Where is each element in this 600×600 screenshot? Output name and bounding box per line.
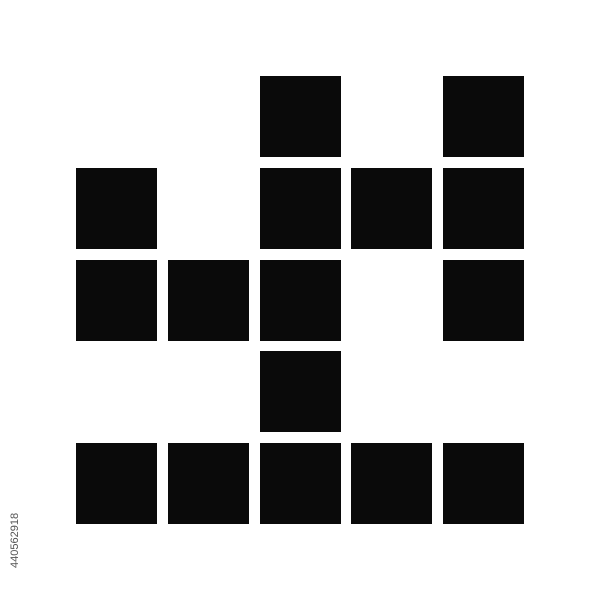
stock id text: 440562918 xyxy=(9,513,21,568)
row 5 squares xyxy=(76,443,524,524)
row 3 squares xyxy=(76,260,524,341)
row 1 squares xyxy=(260,76,524,157)
row 4 square xyxy=(260,351,341,432)
row 2 squares xyxy=(76,168,524,249)
